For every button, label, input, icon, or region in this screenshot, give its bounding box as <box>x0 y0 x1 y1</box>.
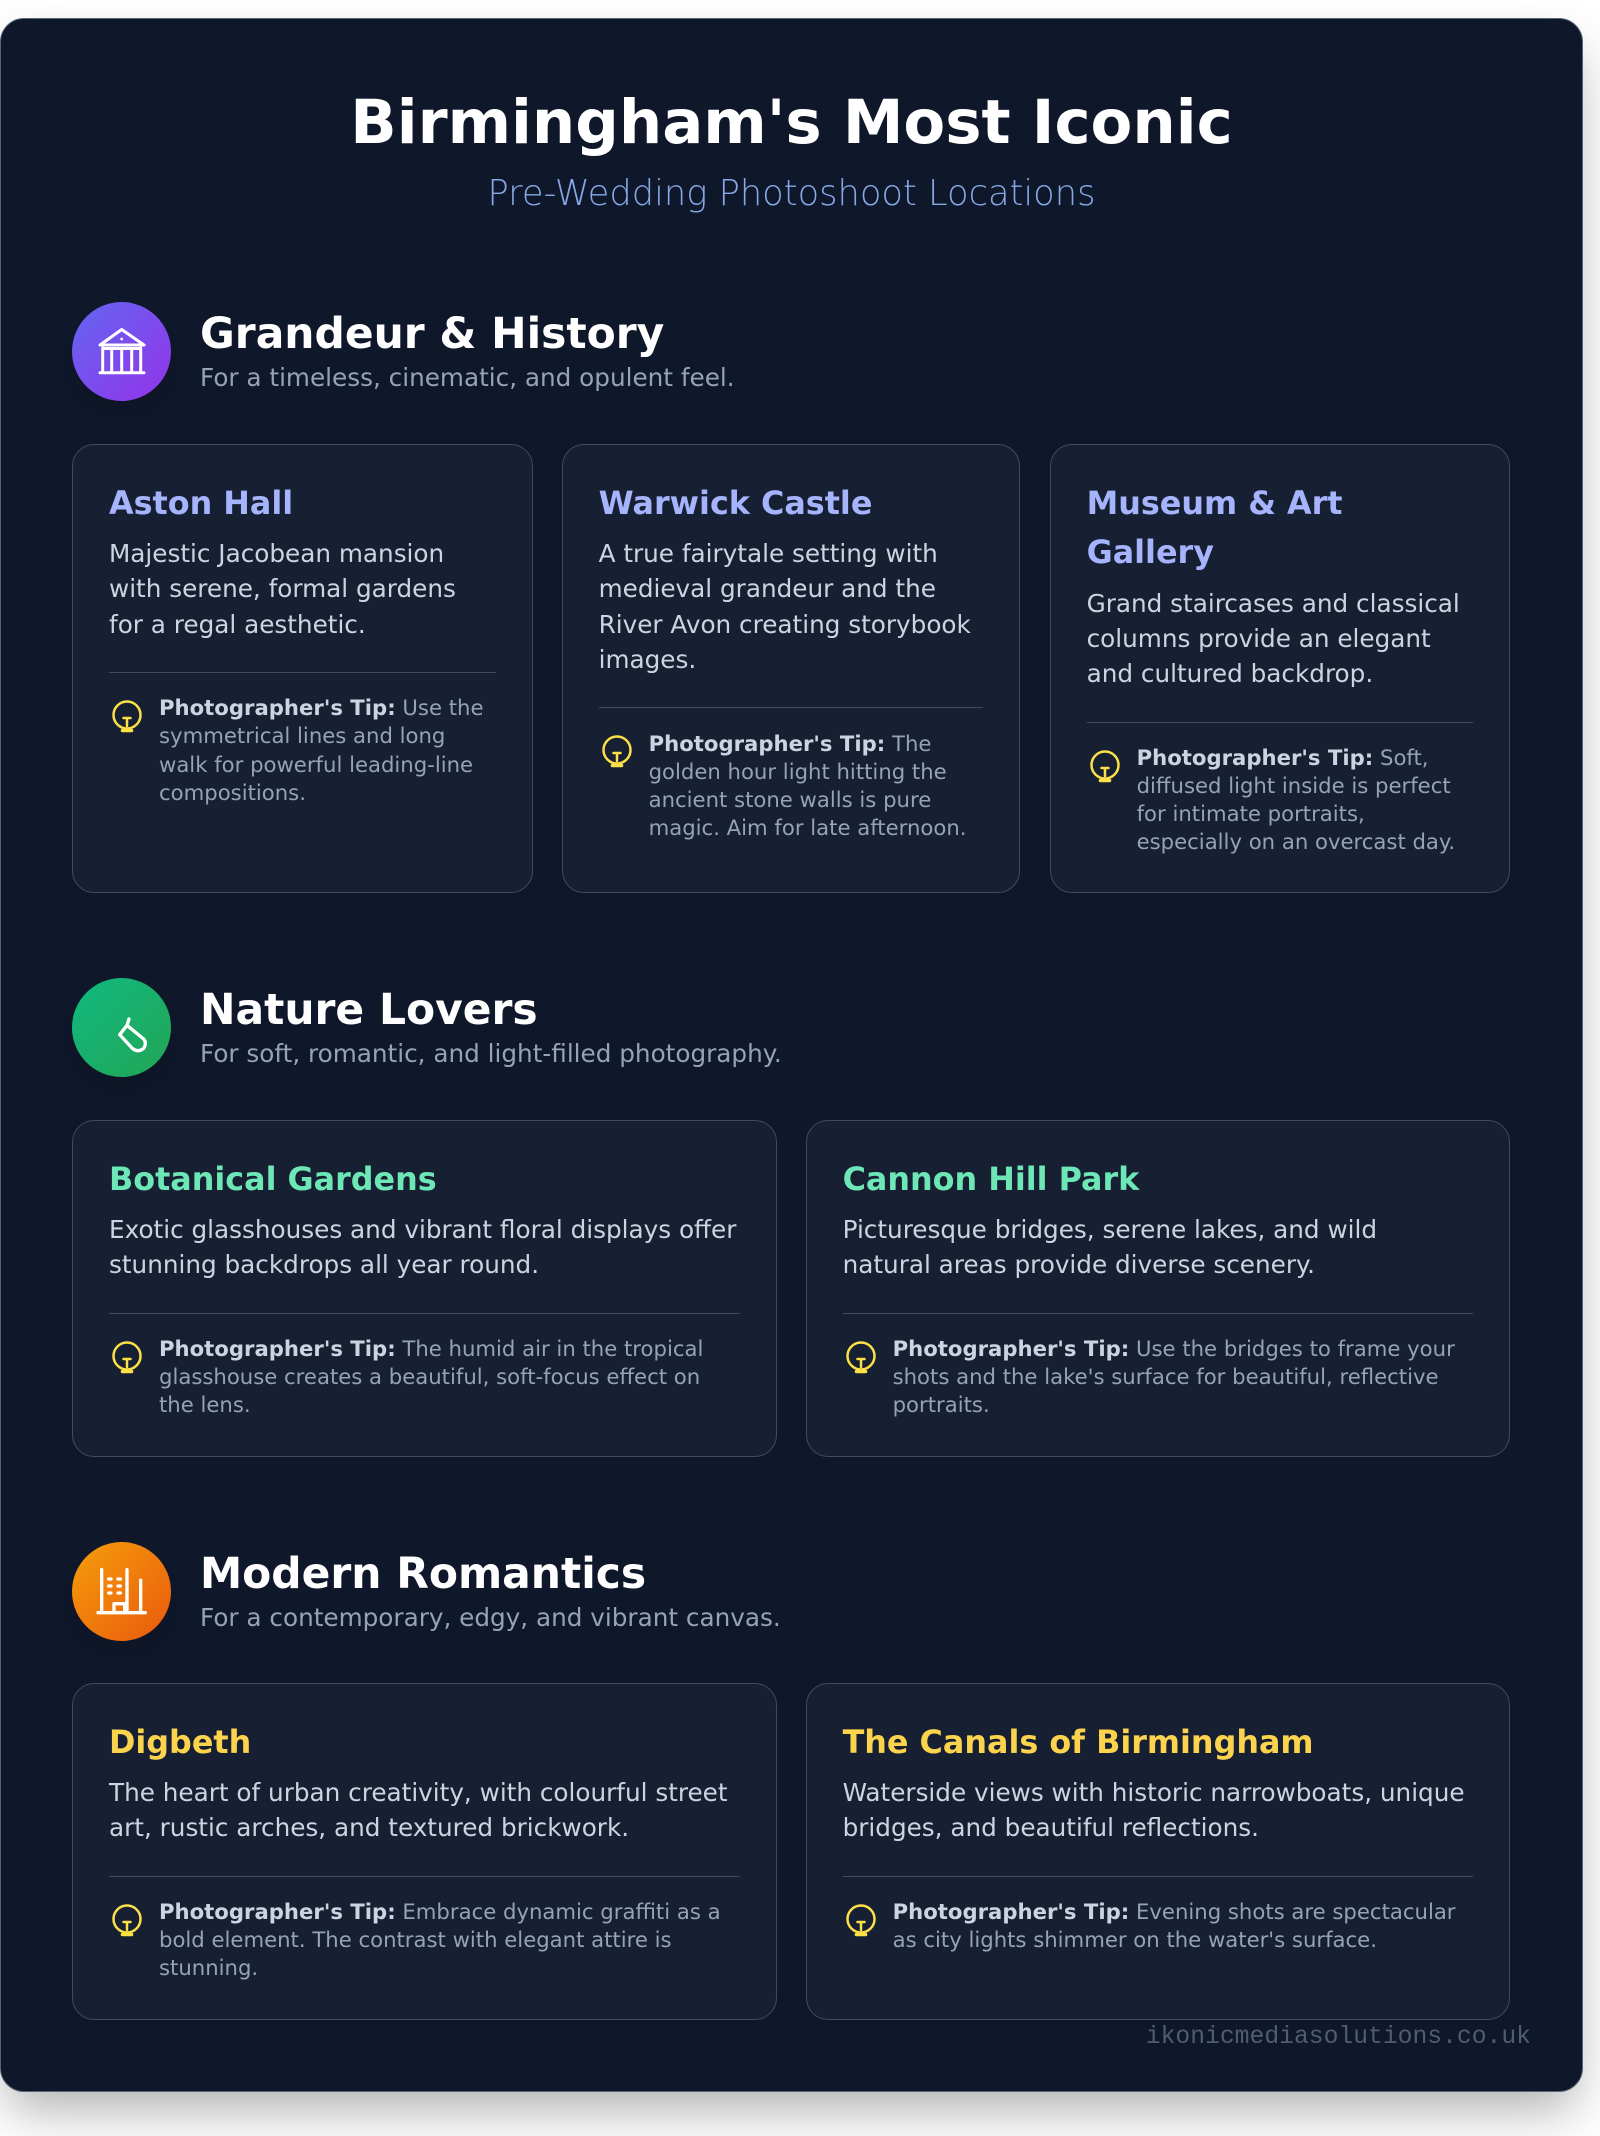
card: The Canals of Birmingham: Photographer's Tip: Evening shots are spectacular <box>893 1899 1456 1924</box>
section heading: Modern Romantics: For a contemporary, edgy, and vibrant canvas. <box>200 1603 781 1632</box>
card: Cannon Hill Park: Photographer's Tip: Use the bridges to frame your <box>893 1336 1455 1361</box>
card: Digbeth: The heart of urban creativity, with colourful street <box>109 1778 728 1807</box>
card: Aston Hall: Photographer's Tip: Use the <box>159 695 484 720</box>
section heading: Grandeur & History: For a timeless, cinematic, and opulent feel. <box>200 363 735 392</box>
card: Museum & Art Gallery: especially on an overcast day. <box>1137 829 1455 854</box>
card: Museum & Art Gallery: Grand staircases and classical <box>1087 589 1460 618</box>
card: Botanical Gardens: Exotic glasshouses and vibrant floral displays offer <box>109 1215 736 1244</box>
card: Cannon Hill Park: natural areas provide diverse scenery. <box>843 1250 1315 1279</box>
card: Museum & Art Gallery: and cultured backdrop. <box>1087 659 1373 688</box>
card: Cannon Hill Park: portraits. <box>893 1392 990 1417</box>
card: The Canals of Birmingham: as city lights shimmer on the water's surface. <box>893 1927 1377 1952</box>
card: Warwick Castle: Warwick Castle <box>599 485 872 522</box>
card: Digbeth <box>72 1683 777 2020</box>
card: Aston Hall: for a regal aesthetic. <box>109 610 366 639</box>
card: Botanical Gardens: glasshouse creates a beautiful, soft-focus effect on <box>159 1364 700 1389</box>
icon: city buildings <box>72 1542 171 1640</box>
card: The Canals of Birmingham: Waterside views with historic narrowboats, unique <box>843 1778 1465 1807</box>
card: Warwick Castle: ancient stone walls is pure <box>649 787 931 812</box>
card: Museum & Art Gallery <box>1050 444 1510 893</box>
card: Aston Hall: with serene, formal gardens <box>109 574 456 603</box>
card: Aston Hall: Majestic Jacobean mansion <box>109 539 444 568</box>
card: Digbeth: Photographer's Tip: Embrace dynamic graffiti as a <box>159 1899 721 1924</box>
card: Cannon Hill Park: shots and the lake's surface for beautiful, reflective <box>893 1364 1439 1389</box>
icon: leaf <box>72 978 171 1077</box>
section heading: Nature Lovers: Nature Lovers <box>200 984 538 1034</box>
card: Aston Hall: Aston Hall <box>109 485 293 522</box>
card: Warwick Castle: A true fairytale setting with <box>599 539 938 568</box>
card: Cannon Hill Park: Picturesque bridges, serene lakes, and wild <box>843 1215 1377 1244</box>
card: Digbeth: art, rustic arches, and textured brickwork. <box>109 1813 629 1842</box>
icon: museum building <box>72 302 171 401</box>
card: Warwick Castle: golden hour light hitting the <box>649 759 947 784</box>
card: Museum & Art Gallery: Gallery <box>1087 534 1214 571</box>
section heading: Grandeur & History <box>200 308 735 392</box>
section heading: Nature Lovers: For soft, romantic, and light-filled photography. <box>200 1039 782 1068</box>
card: The Canals of Birmingham <box>806 1683 1510 2020</box>
card: The Canals of Birmingham: bridges, and beautiful reflections. <box>843 1813 1259 1842</box>
section heading: Modern Romantics: Modern Romantics <box>200 1548 646 1598</box>
card: Museum & Art Gallery: diffused light inside is perfect <box>1137 773 1451 798</box>
card: Botanical Gardens: Photographer's Tip: The humid air in the tropical <box>159 1336 703 1361</box>
card: Museum & Art Gallery: columns provide an elegant <box>1087 624 1431 653</box>
card: Warwick Castle: medieval grandeur and the <box>599 574 936 603</box>
card: Museum & Art Gallery: Museum & Art <box>1087 485 1342 522</box>
card: Digbeth: stunning. <box>159 1955 258 1980</box>
title: Birmingham's Most Iconic <box>350 87 1233 158</box>
card: Cannon Hill Park: Cannon Hill Park <box>843 1161 1139 1198</box>
card: Warwick Castle: magic. Aim for late afternoon. <box>649 815 967 840</box>
card: Museum & Art Gallery: Photographer's Tip: Soft, <box>1137 745 1429 770</box>
section heading: Grandeur & History: Grandeur & History <box>200 308 664 358</box>
card: Botanical Gardens: stunning backdrops all year round. <box>109 1250 539 1279</box>
card: Digbeth: bold element. The contrast with elegant attire is <box>159 1927 672 1952</box>
section heading: Modern Romantics <box>200 1548 781 1632</box>
card: Botanical Gardens: the lens. <box>159 1392 251 1417</box>
card: Warwick Castle: River Avon creating storybook <box>599 610 971 639</box>
card: Aston Hall: symmetrical lines and long <box>159 723 445 748</box>
card: Digbeth: Digbeth <box>109 1724 251 1761</box>
card: Botanical Gardens <box>72 1120 777 1457</box>
card: Aston Hall: compositions. <box>159 780 306 805</box>
card: Warwick Castle: images. <box>599 645 696 674</box>
footer website: ikonicmediasolutions.co.uk <box>1146 2023 1531 2051</box>
card: Aston Hall: walk for powerful leading-line <box>159 752 473 777</box>
card: Warwick Castle: Photographer's Tip: The <box>649 731 931 756</box>
card: Warwick Castle <box>562 444 1020 893</box>
card: Museum & Art Gallery: for intimate portraits, <box>1137 801 1365 826</box>
card: The Canals of Birmingham: The Canals of Birmingham <box>843 1724 1314 1761</box>
subtitle: Pre-Wedding Photoshoot Locations <box>488 172 1095 214</box>
section heading: Nature Lovers <box>200 984 782 1068</box>
card: Cannon Hill Park <box>806 1120 1510 1457</box>
card: Botanical Gardens: Botanical Gardens <box>109 1161 437 1198</box>
card: Aston Hall <box>72 444 533 893</box>
